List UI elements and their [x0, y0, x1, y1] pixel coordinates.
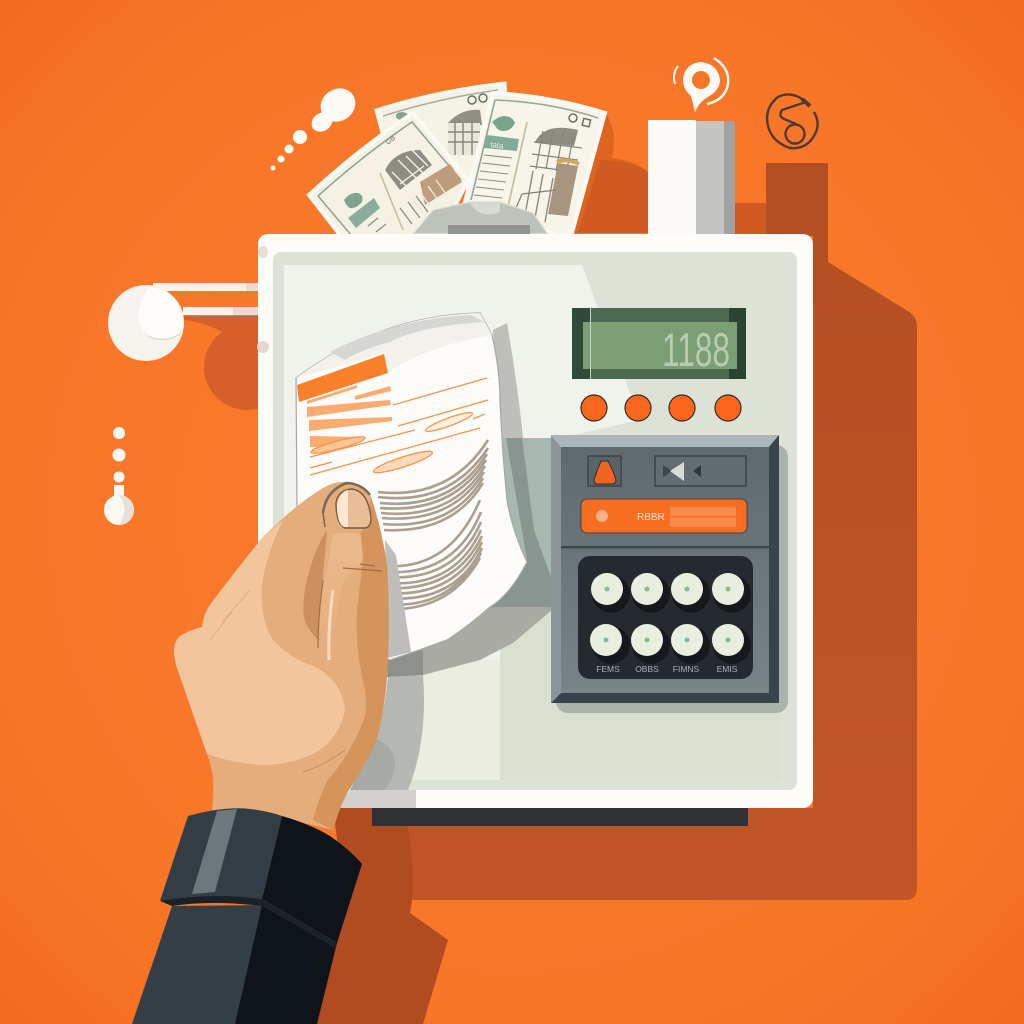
- hand: [174, 482, 389, 830]
- dark button panel: OBBS: [635, 664, 659, 674]
- icon: thought bubble dots: [270, 82, 362, 170]
- thumbnail: [336, 489, 371, 528]
- banknote: left: GB: [385, 135, 397, 147]
- icon: location pin signal: [674, 58, 728, 112]
- arrow indicator: [655, 456, 746, 486]
- indicator lights: [581, 395, 741, 421]
- dark button panel: FIMNS: [673, 664, 700, 674]
- meter cast shadow: [184, 113, 917, 1024]
- meter face: [273, 252, 797, 790]
- banknote: back: [376, 83, 510, 200]
- bill curled pages: [378, 440, 488, 609]
- icon: circular gauge glyph: [767, 94, 818, 148]
- banknote: front: [465, 93, 605, 240]
- dark button panel: FEMS: [596, 664, 620, 674]
- base bar: [372, 808, 748, 826]
- orange display button: RBBR: [637, 512, 665, 523]
- paper shadow: [387, 323, 552, 677]
- LCD display: [572, 308, 746, 379]
- keypad device: [551, 435, 788, 713]
- bill document: [296, 313, 527, 660]
- orange display button: [581, 499, 747, 533]
- banknote: front: tata: [490, 140, 505, 151]
- dark button panel: [578, 556, 753, 679]
- note tray: [413, 202, 548, 234]
- sleeve: [132, 808, 362, 1024]
- banknote: left: [309, 113, 468, 240]
- bill text strokes: [310, 378, 488, 476]
- alert button: [588, 456, 621, 486]
- banknotes fan: [309, 83, 605, 240]
- thumb side page shade: [385, 540, 411, 658]
- dark button panel: EMIS: [717, 664, 738, 674]
- tower block: [648, 120, 735, 234]
- bill header bar: [297, 354, 388, 402]
- lower grey hand shadow: [337, 675, 424, 808]
- icon: left dots and bulb: [104, 427, 134, 525]
- LCD display: 1188: [662, 323, 730, 376]
- bill table lines: [307, 385, 392, 447]
- panel: meter housing: [257, 234, 813, 808]
- icon: left plug dial: [108, 283, 268, 361]
